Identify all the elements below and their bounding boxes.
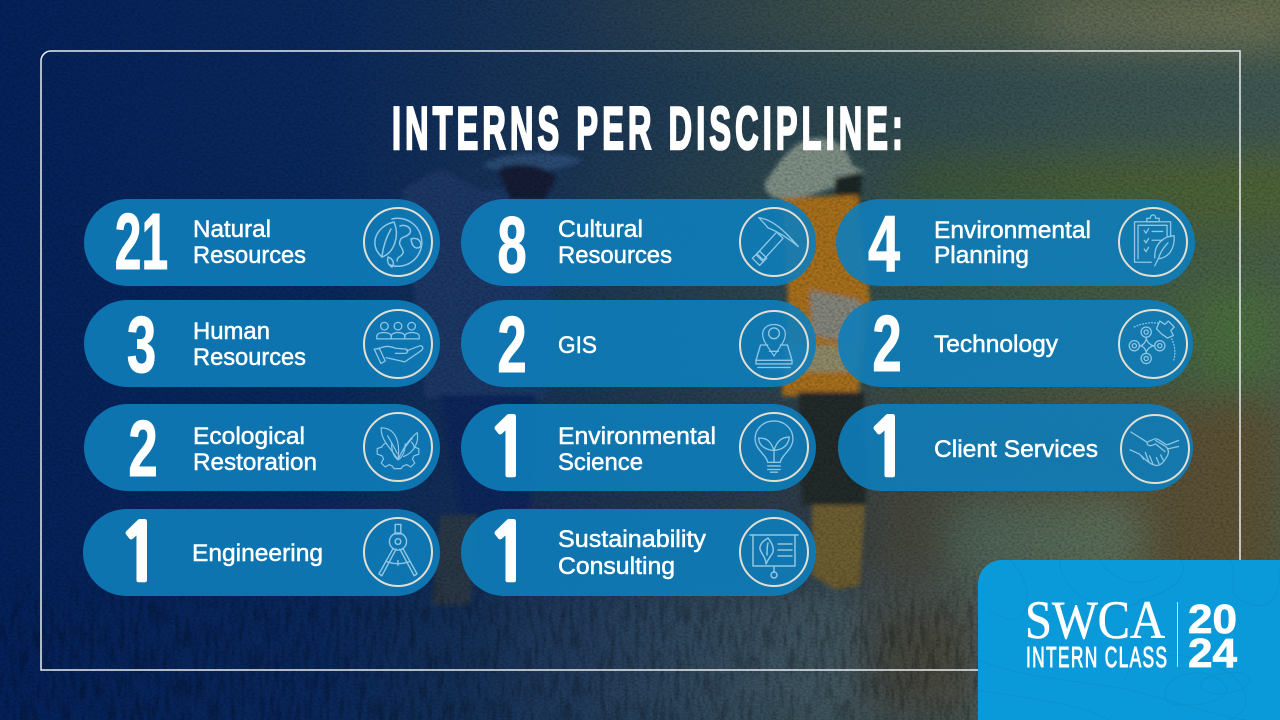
panel: human resources xyxy=(84,300,440,390)
year xyxy=(1188,596,1237,676)
divider xyxy=(1177,602,1178,667)
panel: natural resources xyxy=(84,196,440,286)
label: Resources xyxy=(193,344,306,371)
count: 2 xyxy=(872,300,902,389)
icon: presentation board with leaf xyxy=(740,518,808,586)
label xyxy=(558,526,706,580)
icon: drafting compass xyxy=(364,518,432,586)
year: 24 xyxy=(1188,630,1237,676)
panel: cultural resources xyxy=(461,199,816,290)
count: 1 xyxy=(486,408,532,488)
panel: technology xyxy=(838,300,1193,389)
label xyxy=(193,216,306,269)
icon: map pin on map xyxy=(740,311,808,379)
label xyxy=(558,423,716,476)
label: Cultural xyxy=(558,216,643,243)
label: Engineering xyxy=(192,540,323,567)
count: 2 xyxy=(497,301,527,390)
label: Sustainability xyxy=(558,526,706,553)
label: Technology xyxy=(934,331,1058,358)
icon: earth with leaf xyxy=(364,208,432,276)
count: 1 xyxy=(865,408,911,488)
icon: gear with leaves xyxy=(364,413,432,481)
label: Environmental xyxy=(558,423,716,450)
panel: environmental planning xyxy=(836,199,1195,288)
icon: clipboard with leaf xyxy=(1119,208,1187,276)
label xyxy=(934,217,1091,269)
label: Client Services xyxy=(934,436,1098,463)
icon: handshake xyxy=(1121,415,1189,483)
count: 1 xyxy=(486,513,532,593)
label: Environmental xyxy=(934,217,1091,244)
count: 2 xyxy=(128,405,158,494)
year: 20 xyxy=(1188,596,1237,642)
label: Ecological xyxy=(193,423,305,450)
logo panel xyxy=(978,560,1280,720)
label: Natural xyxy=(193,216,271,243)
label xyxy=(193,423,317,476)
count: 3 xyxy=(127,301,156,390)
panel: client services xyxy=(838,404,1193,491)
label: Human xyxy=(193,318,270,345)
count: 1 xyxy=(117,513,163,593)
label: Planning xyxy=(934,242,1029,269)
SWCA wordmark: SWCA xyxy=(1025,590,1165,650)
label: Science xyxy=(558,449,643,476)
panel: ecological restoration xyxy=(84,404,440,494)
topographic contour lines xyxy=(978,560,1280,720)
icon: people above open hand xyxy=(364,310,432,378)
title: INTERNS PER DISCIPLINE: xyxy=(392,95,903,163)
panel: sustainability consulting xyxy=(461,509,816,596)
label xyxy=(558,216,672,269)
panel: engineering xyxy=(83,509,440,596)
icon: pickaxe xyxy=(740,208,808,276)
right surveyor xyxy=(765,138,870,590)
label: Resources xyxy=(193,242,306,269)
icon: satellite and network nodes xyxy=(1119,310,1187,378)
panel: GIS xyxy=(461,300,816,390)
left surveyor xyxy=(402,153,582,605)
panel: environmental science xyxy=(461,404,816,491)
label: Resources xyxy=(558,242,672,269)
intern class: INTERN CLASS xyxy=(1026,642,1167,674)
label: Consulting xyxy=(558,553,675,580)
count: 4 xyxy=(868,199,900,288)
label: GIS xyxy=(558,332,597,359)
label: Restoration xyxy=(193,449,317,476)
label xyxy=(193,318,306,371)
icon: light bulb with leaves xyxy=(740,413,808,481)
count: 8 xyxy=(497,201,527,290)
count: 21 xyxy=(115,196,168,286)
